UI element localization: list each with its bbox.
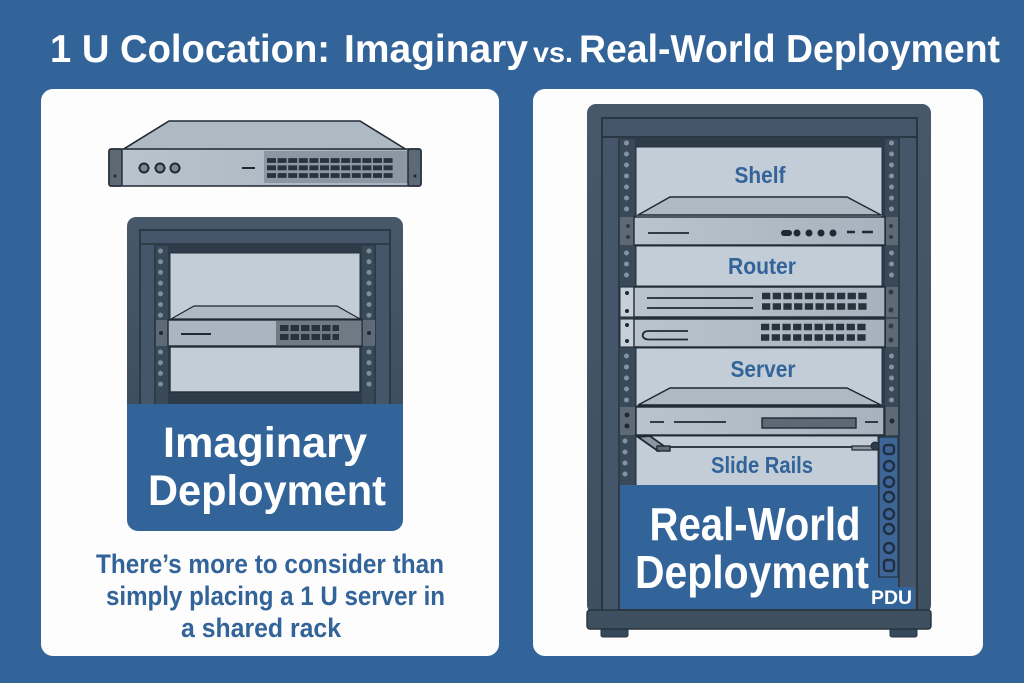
label: real-world deployment: Deployment [635,546,869,598]
rack: imaginary [127,217,403,405]
caption: a shared rack [181,613,342,643]
caption [96,549,445,643]
title [50,28,1000,71]
panel: imaginary deployment [41,89,499,656]
caption: simply placing a 1 U server in [106,581,445,611]
title: 1 U Colocation: [50,28,330,71]
server: lower unit [620,388,898,435]
label: imaginary deployment: Imaginary [163,419,367,467]
panel: real-world deployment [533,89,983,656]
device labels: Shelf [734,162,786,188]
PDU strip [879,437,898,577]
router units [620,287,898,347]
label: real-world deployment: Real-World [650,498,860,550]
server: top unit [620,197,898,245]
label: imaginary deployment [127,404,403,531]
device labels: Slide Rails [711,452,813,478]
device labels: Server [730,356,796,382]
label: real-world deployment [620,485,915,609]
device labels: Router [728,253,796,279]
shelves [636,147,882,486]
icon: rack-mounted server [156,306,375,346]
slide rails [638,436,879,451]
device labels [711,162,813,478]
icon: 1U server [109,121,421,186]
rack: real-world [587,104,931,637]
label: imaginary deployment: Deployment [148,467,386,515]
base and feet [587,610,931,637]
caption: There’s more to consider than [96,549,444,579]
title: Imaginary [344,28,528,71]
title: Real-World Deployment [579,28,1000,71]
title: vs. [533,37,573,68]
PDU label: PDU [871,588,912,609]
